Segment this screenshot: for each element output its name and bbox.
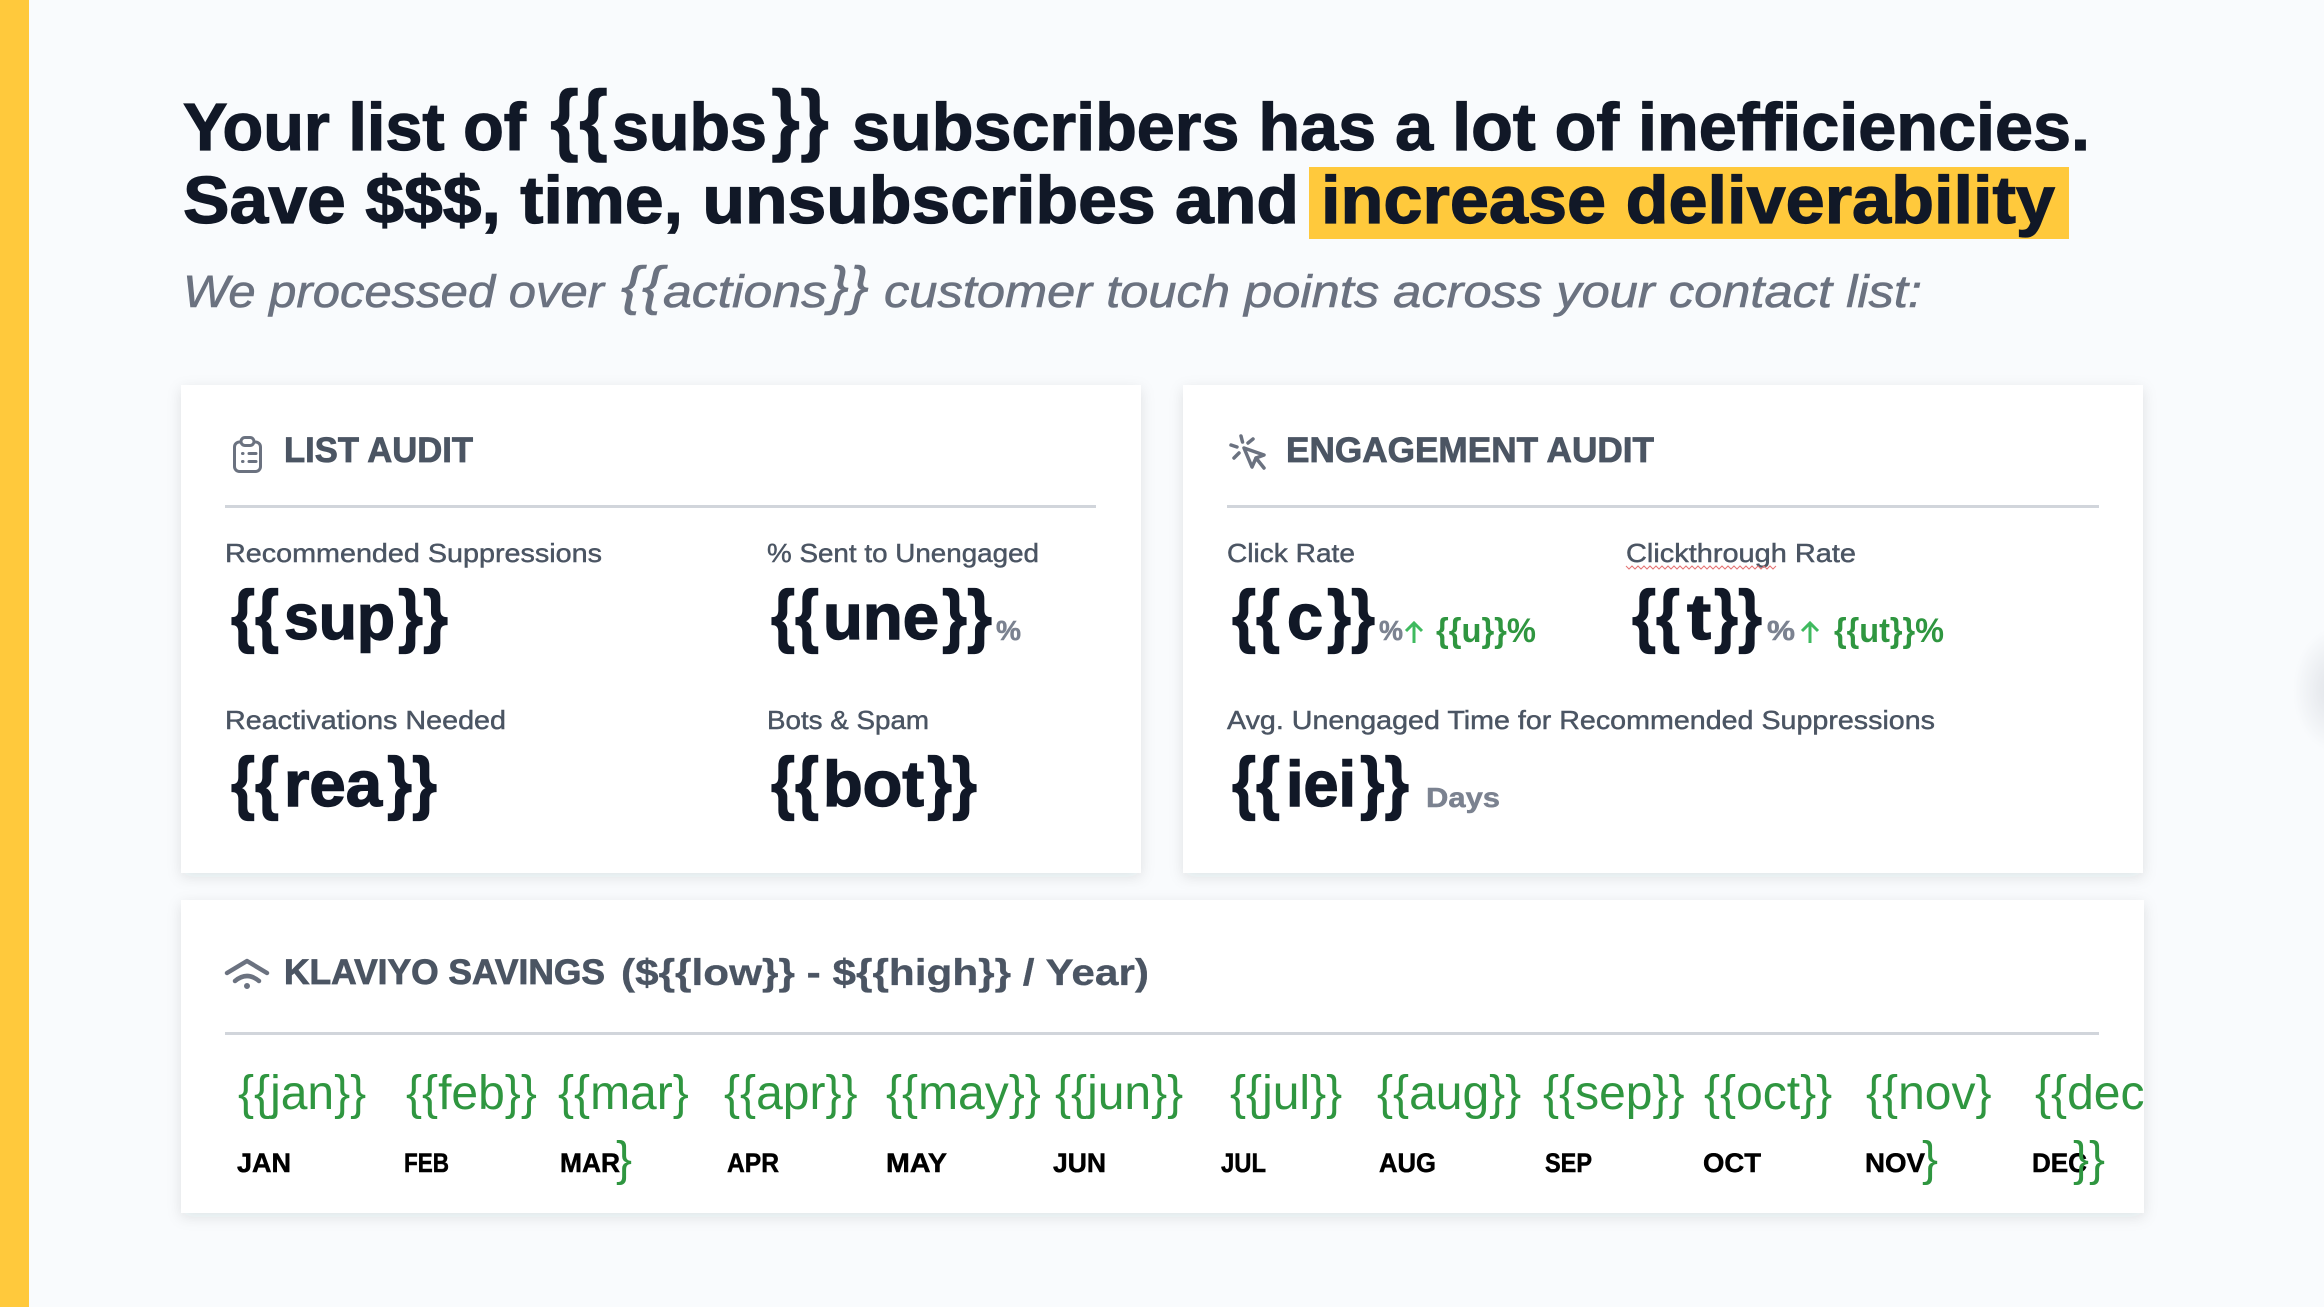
month: march: MAR (560, 1148, 620, 1178)
metric: average unengaged time (1227, 705, 1935, 821)
metric: bots and spam: Bots & Spam (767, 705, 929, 735)
title: }} (771, 74, 829, 163)
subtitle: }} (823, 256, 869, 316)
month: september: {{sep}} (1543, 1067, 1685, 1120)
metric: click rate: {{u}}% (1436, 612, 1536, 650)
month: december: DEC (2032, 1148, 2087, 1178)
metric: clickthrough rate: % (1767, 615, 1795, 646)
panel: klaviyo savings (181, 900, 2144, 1213)
month: november (1865, 1067, 1991, 1186)
month: july (1221, 1067, 1342, 1178)
metric: clickthrough rate: }} (1714, 576, 1762, 654)
metric: reactivations needed: Reactivations Needed (225, 705, 506, 735)
metric: click rate: Click Rate (1227, 538, 1355, 568)
metric: click rate (1227, 538, 1536, 654)
metric: average unengaged time: Days (1426, 782, 1500, 813)
month: march: } (616, 1133, 632, 1186)
arrow: clickthrough rate up (1802, 623, 1818, 643)
metric: recommended suppressions: }} (398, 576, 448, 654)
metric: percent sent to unengaged: {{ (771, 576, 819, 654)
metric: reactivations needed: }} (387, 743, 437, 821)
month: april (724, 1067, 858, 1178)
month: april: APR (727, 1148, 779, 1178)
subtitle: We processed over (183, 266, 606, 317)
metric: reactivations needed (225, 705, 506, 821)
metric: average unengaged time: }} (1360, 743, 1409, 821)
title (183, 74, 2090, 239)
month: february: {{feb}} (406, 1067, 537, 1120)
metric: reactivations needed: rea (284, 748, 382, 820)
metric: percent sent to unengaged: % Sent to Unengaged (767, 538, 1039, 568)
metric: clickthrough rate: t (1687, 581, 1711, 653)
panel: list audit (181, 385, 1141, 873)
metric: percent sent to unengaged: % (996, 615, 1021, 646)
month: february: FEB (404, 1148, 449, 1178)
panel: engagement audit (1183, 385, 2143, 873)
subtitle: actions (663, 266, 827, 317)
metric: click rate: }} (1327, 576, 1375, 654)
month: august: AUG (1379, 1148, 1436, 1178)
heading: klaviyo savings: KLAVIYO SAVINGS (284, 953, 605, 992)
metric: percent sent to unengaged (767, 538, 1039, 654)
metric: bots and spam: }} (927, 743, 977, 821)
heading: list audit: LIST AUDIT (284, 431, 473, 470)
metric: recommended suppressions: Recommended Suppressions (225, 538, 602, 568)
metric: reactivations needed: {{ (231, 743, 279, 821)
month: december: {{dec (2035, 1067, 2144, 1120)
month: may (886, 1067, 1041, 1178)
month: june (1053, 1067, 1183, 1178)
metric: average unengaged time: Avg. Unengaged Time for Recommended Suppressions (1227, 705, 1935, 735)
month: october (1703, 1067, 1832, 1178)
month: june: JUN (1053, 1148, 1106, 1178)
metric: percent sent to unengaged: une (823, 581, 939, 653)
metric: clickthrough rate: {{ut}}% (1834, 612, 1944, 650)
month: may: {{may}} (886, 1067, 1041, 1120)
title: Your list of (183, 90, 527, 165)
month: november: {{nov} (1866, 1067, 1991, 1120)
metric: click rate: % (1379, 615, 1403, 646)
metric: average unengaged time: iei (1286, 748, 1356, 820)
metric: clickthrough rate (1626, 538, 1944, 654)
subtitle: {{ (621, 256, 668, 316)
month: september (1543, 1067, 1685, 1178)
month: november: NOV (1865, 1148, 1925, 1178)
month: march (558, 1067, 689, 1186)
month: september: SEP (1545, 1148, 1592, 1178)
month: february (404, 1067, 537, 1178)
month: december: }} (2073, 1133, 2105, 1186)
title: Save $$$, time, unsubscribes and (183, 163, 1299, 238)
metric: clickthrough rate: {{ (1632, 576, 1680, 654)
icon: cursor click (1231, 436, 1264, 468)
subtitle: customer touch points across your contact list: (884, 266, 1922, 317)
month: july: JUL (1221, 1148, 1266, 1178)
month: october: {{oct}} (1704, 1067, 1832, 1120)
icon: clipboard (234, 438, 260, 472)
month: november: } (1922, 1133, 1938, 1186)
metric: bots and spam: {{ (771, 743, 819, 821)
title: subscribers has a lot of inefficiencies. (852, 90, 2090, 165)
metric: percent sent to unengaged: }} (942, 576, 992, 654)
month: april: {{apr}} (724, 1067, 858, 1120)
month: march: {{mar} (558, 1067, 689, 1120)
month: august: {{aug}} (1377, 1067, 1521, 1120)
metric: recommended suppressions: sup (284, 581, 395, 653)
month: june: {{jun}} (1055, 1067, 1183, 1120)
month: october: OCT (1703, 1148, 1762, 1178)
arrow: click rate up (1406, 623, 1422, 643)
month: july: {{jul}} (1230, 1067, 1342, 1120)
yellow sidebar (0, 0, 29, 1307)
month: december (2032, 1067, 2144, 1186)
metric: bots and spam: bot (823, 748, 924, 820)
metric: average unengaged time: {{ (1232, 743, 1280, 821)
month: january: JAN (237, 1148, 291, 1178)
metric: clickthrough rate: Clickthrough Rate (1626, 538, 1856, 568)
title: increase deliverability (1321, 163, 2055, 238)
metric: recommended suppressions: {{ (231, 576, 279, 654)
heading: klaviyo savings: (${{low}} - ${{high}} / Year) (621, 952, 1149, 993)
month: august (1377, 1067, 1521, 1178)
metric: recommended suppressions (225, 538, 602, 654)
icon: wifi signal (227, 961, 267, 988)
title: {{ (550, 74, 608, 163)
heading: engagement audit: ENGAGEMENT AUDIT (1286, 431, 1654, 470)
month: january: {{jan}} (238, 1067, 366, 1120)
spellcheck squiggle (1626, 566, 1776, 569)
month: january (237, 1067, 366, 1178)
metric: click rate: c (1287, 581, 1323, 653)
highlight behind title (1309, 167, 2069, 239)
title: subs (612, 90, 767, 165)
metric: bots and spam (767, 705, 977, 821)
metric: click rate: {{ (1232, 576, 1280, 654)
month: may: MAY (886, 1148, 947, 1178)
